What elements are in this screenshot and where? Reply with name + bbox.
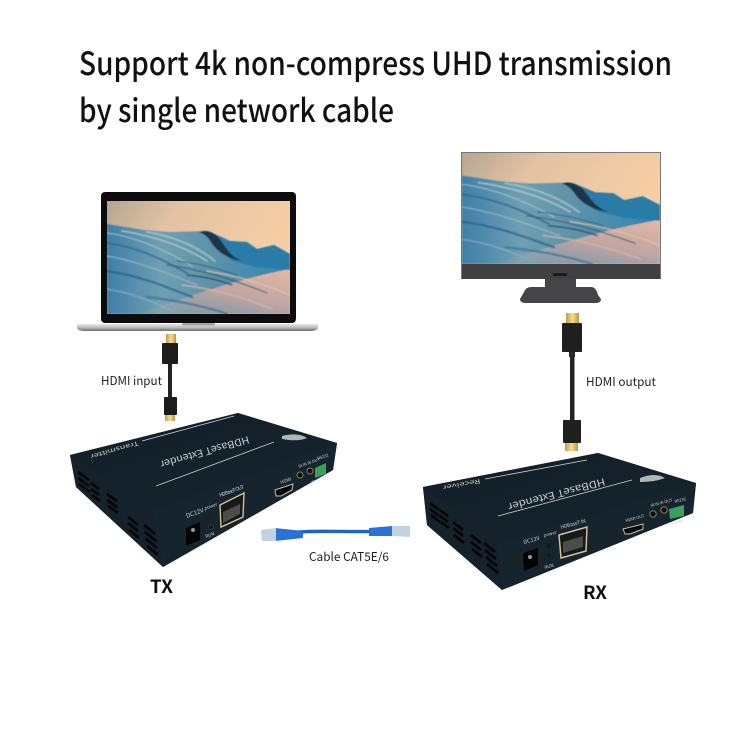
transmitter RJ45 port <box>220 493 244 527</box>
receiver printed labels: HDBaseT IN <box>560 517 587 531</box>
title: by single network cable <box>79 86 394 132</box>
transmitter audio jacks <box>297 472 303 478</box>
transmitter box <box>70 413 337 567</box>
transmitter printed labels: DC12V <box>185 505 205 520</box>
monitor <box>461 152 661 303</box>
receiver vents <box>430 503 498 573</box>
transmitter printed labels: IR IN IR OUT <box>298 456 321 470</box>
HDMI input cable <box>162 334 178 421</box>
transmitter green terminal <box>315 463 326 478</box>
label: RX: RX <box>583 579 608 605</box>
receiver printed labels: HDBaseT Extender <box>507 475 607 516</box>
transmitter printed labels: HDBaseT OUT <box>218 483 245 499</box>
receiver printed labels: power <box>543 530 558 539</box>
receiver printed labels: DC12V <box>522 534 541 546</box>
transmitter printed labels: TX ⊕ RX <box>311 475 328 486</box>
transmitter logo <box>282 434 307 440</box>
receiver printed labels: RUN <box>544 563 555 571</box>
receiver printed labels: Receiver <box>441 477 481 493</box>
monitor screen wave image <box>462 153 660 264</box>
label: HDMI input: HDMI input <box>101 372 162 389</box>
title: Support 4k non-compress UHD transmission <box>79 39 672 85</box>
receiver audio jacks <box>650 511 656 517</box>
transmitter front face <box>152 443 337 567</box>
receiver printed labels: RS232 <box>674 496 687 505</box>
label: HDMI output: HDMI output <box>586 373 656 390</box>
label: Cable CAT5E/6: Cable CAT5E/6 <box>309 548 389 565</box>
transmitter left face <box>70 455 163 567</box>
transmitter printed labels: HDBaseT Extender <box>159 433 251 473</box>
HDMI output cable <box>562 313 582 451</box>
transmitter LEDs <box>208 515 212 519</box>
receiver power jack <box>523 548 538 571</box>
receiver front face <box>498 483 696 590</box>
receiver printed labels <box>441 475 687 571</box>
receiver LEDs <box>547 544 551 548</box>
transmitter top face <box>70 413 337 510</box>
receiver HDMI port <box>623 524 643 534</box>
transmitter power jack <box>186 522 200 546</box>
receiver RJ45 port <box>559 527 587 558</box>
transmitter printed labels: power <box>204 502 218 512</box>
laptop screen wave image <box>107 201 290 314</box>
receiver green terminal <box>669 505 684 519</box>
transmitter vents <box>78 472 158 555</box>
receiver logo <box>640 475 665 482</box>
network cable <box>261 526 410 541</box>
receiver printed labels: IR IN IR OUT <box>650 497 674 509</box>
receiver printed labels: TX ⊕ RX <box>668 518 685 528</box>
receiver box <box>423 453 696 590</box>
monitor bezel <box>462 264 660 279</box>
label: TX: TX <box>150 573 174 599</box>
title <box>79 39 672 132</box>
laptop <box>77 192 318 331</box>
monitor stand <box>520 279 601 303</box>
receiver left face <box>423 487 502 590</box>
transmitter HDMI port <box>275 484 293 496</box>
transmitter printed labels: RS232 <box>317 452 330 462</box>
receiver printed labels: HDMI OUT <box>625 513 646 524</box>
transmitter printed labels: HDMI <box>280 476 292 486</box>
transmitter printed labels: RUN <box>205 531 215 540</box>
transmitter printed labels <box>88 433 330 540</box>
receiver top face <box>423 453 696 543</box>
transmitter printed labels: Transmitter <box>88 439 140 462</box>
laptop base <box>77 324 318 331</box>
